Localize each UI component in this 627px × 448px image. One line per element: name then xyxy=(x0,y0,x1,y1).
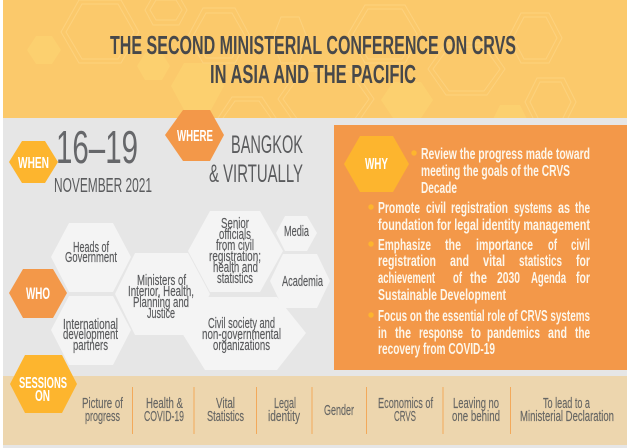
session: legal identity xyxy=(268,396,301,425)
session: ministerial declaration: To lead to a xyxy=(543,396,591,412)
panel: where xyxy=(165,110,303,188)
session: health and covid: COVID-19 xyxy=(144,409,184,425)
international development partners: partners xyxy=(73,338,108,354)
bullet: emphasize importance: registration xyxy=(378,253,436,270)
bullet: focus on essential role: the xyxy=(575,325,590,342)
session: vital statistics xyxy=(207,396,244,425)
icon: why hexagon xyxy=(344,136,409,192)
senior officials: Senior xyxy=(221,216,249,232)
media: Media xyxy=(284,224,310,240)
panel: when: WHEN xyxy=(18,155,49,172)
session: picture of progress: Picture of xyxy=(82,396,124,412)
bullet: promote civil registration: registration xyxy=(451,200,508,217)
bullet: emphasize importance: statistics xyxy=(519,253,562,270)
bullet: emphasize importance: for xyxy=(576,270,590,287)
bullet: emphasize importance: Agenda xyxy=(531,270,566,287)
icon: who hexagon: WHO xyxy=(26,284,50,303)
session: economics of crvs: CRVS xyxy=(394,409,416,425)
heads of government: Government xyxy=(65,250,117,266)
bullet: review progress: Decade xyxy=(421,180,457,197)
bullet: focus on essential role xyxy=(368,308,590,358)
bullet: promote civil registration: Promote xyxy=(378,200,420,217)
civil society: non-governmental xyxy=(202,327,281,343)
panel: sessions bar xyxy=(3,355,627,445)
panel: where: & VIRTUALLY xyxy=(209,160,303,188)
bullet: emphasize importance: 2030 xyxy=(497,270,520,287)
bullet: focus on essential role: to xyxy=(471,325,481,342)
session: legal identity: Legal xyxy=(274,396,296,412)
bullet: emphasize importance: and xyxy=(450,253,469,270)
session: economics of crvs: Economics of xyxy=(378,396,434,412)
bullet: emphasize importance: Sustainable Development xyxy=(378,287,506,304)
bullet: emphasize importance: civil xyxy=(571,237,590,254)
session: legal identity: identity xyxy=(268,409,301,425)
icon: sessions hexagon: ON xyxy=(35,388,50,405)
bullet: focus on essential role: in xyxy=(378,325,387,342)
bullet: promote civil registration: systems xyxy=(514,200,552,217)
bullet: promote civil registration: the xyxy=(575,200,590,217)
ministers: Ministers of xyxy=(137,273,187,289)
ministers xyxy=(115,253,210,335)
session: gender: Gender xyxy=(324,403,354,419)
panel: top banner xyxy=(3,0,627,118)
academia: Academia xyxy=(282,274,324,290)
session: picture of progress xyxy=(82,396,124,425)
bullet: emphasize importance xyxy=(368,237,590,304)
session: vital statistics: Statistics xyxy=(207,409,244,425)
session: health and covid xyxy=(144,396,184,425)
heads of government xyxy=(51,223,131,292)
bullet: promote civil registration: civil xyxy=(426,200,446,217)
title: IN ASIA AND THE PACIFIC xyxy=(210,59,416,89)
senior officials: health and xyxy=(213,260,258,276)
icon: sessions hexagon: SESSIONS xyxy=(19,375,67,392)
bullet: focus on essential role: response xyxy=(419,325,463,342)
civil society: Civil society and xyxy=(208,316,275,332)
international development partners xyxy=(51,296,131,365)
bullet: emphasize importance: vital xyxy=(483,253,505,270)
session: health and covid: Health & xyxy=(146,396,183,412)
session: leaving no one behind xyxy=(452,396,500,425)
bullet: emphasize importance: of xyxy=(548,237,558,254)
senior officials: from civil xyxy=(216,238,254,254)
civil society xyxy=(182,297,306,370)
heads of government: Heads of xyxy=(73,240,110,256)
session: vital statistics: Vital xyxy=(216,396,235,412)
panel: where: BANGKOK xyxy=(231,131,303,159)
bullet: emphasize importance: for xyxy=(576,253,590,270)
academia xyxy=(270,254,330,308)
ministers: Justice xyxy=(147,306,175,322)
bullet: focus on essential role: the xyxy=(395,325,411,342)
bullet: emphasize importance: achievement xyxy=(378,270,435,287)
bullet: emphasize importance: importance xyxy=(476,237,533,254)
civil society: organizations xyxy=(213,338,270,354)
bullet: emphasize importance: Emphasize xyxy=(378,237,431,254)
session: leaving no one behind: one behind xyxy=(452,409,500,425)
icon: sessions hexagon xyxy=(10,355,77,413)
bullet: emphasize importance: of xyxy=(453,270,463,287)
title xyxy=(110,30,516,89)
international development partners: development xyxy=(63,327,118,343)
ministers: Interior, Health, xyxy=(128,284,194,300)
bullet: emphasize importance: the xyxy=(445,237,461,254)
panel: when xyxy=(9,121,152,197)
senior officials: statistics xyxy=(217,271,253,287)
session: economics of crvs xyxy=(378,396,434,425)
bullet: focus on essential role: pandemics xyxy=(487,325,540,342)
bullet: focus on essential role: recovery from COVID-19 xyxy=(378,341,495,358)
icon: who hexagon xyxy=(9,269,67,318)
session: leaving no one behind: Leaving no xyxy=(453,396,499,412)
session: ministerial declaration xyxy=(520,396,614,425)
panel: when: NOVEMBER 2021 xyxy=(54,175,152,197)
bullet: focus on essential role: and xyxy=(548,325,567,342)
bullet: promote civil registration xyxy=(368,200,590,234)
icon: why hexagon: WHY xyxy=(365,156,388,173)
media xyxy=(276,216,317,251)
panel: who xyxy=(9,211,330,370)
senior officials: officials xyxy=(219,227,251,243)
panel: where: WHERE xyxy=(177,128,213,145)
senior officials xyxy=(188,211,283,292)
bullet: promote civil registration: as xyxy=(558,200,570,217)
panel: grey content background xyxy=(3,118,627,448)
ministers: Planning and xyxy=(133,295,189,311)
bullet: emphasize importance: the xyxy=(470,270,487,287)
senior officials: registration; xyxy=(209,249,261,265)
session: picture of progress: progress xyxy=(85,409,120,425)
panel: when: 16–19 xyxy=(56,121,138,173)
panel: why xyxy=(334,125,627,370)
international development partners: International xyxy=(63,317,118,333)
bullet: review progress xyxy=(411,146,590,197)
